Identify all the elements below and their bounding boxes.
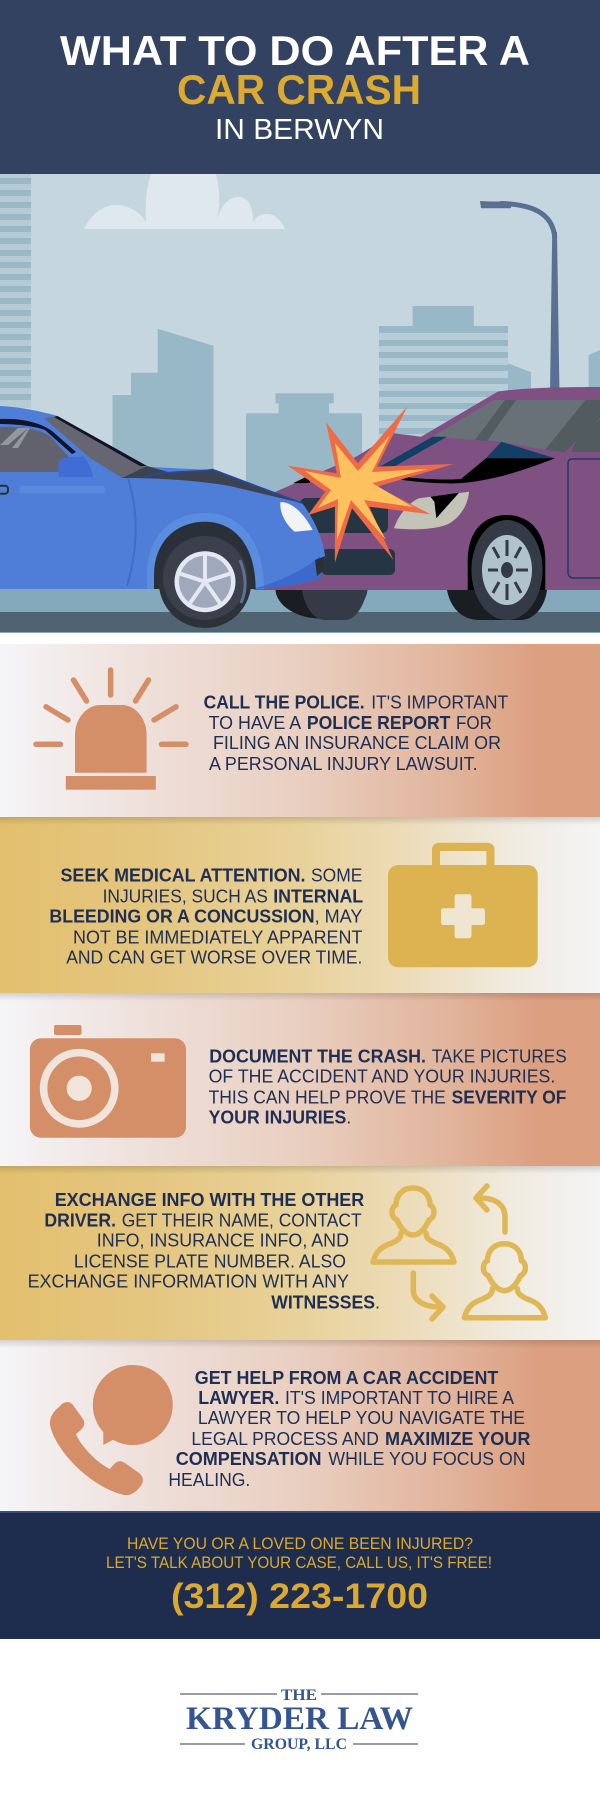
text: document the crash: [209, 1046, 567, 1127]
text: seek medical attention: , MAY: [315, 906, 362, 926]
text: get help from a lawyer: LAWYER.: [198, 1388, 279, 1408]
text: document the crash: .: [346, 1107, 351, 1127]
text: get help from a lawyer: WHILE YOU FOCUS ON: [328, 1449, 526, 1469]
street lamp: [480, 201, 560, 395]
text: call the police: CALL THE POLICE.: [204, 692, 365, 712]
text: document the crash: TAKE PICTURES: [432, 1046, 567, 1066]
text: document the crash: DOCUMENT THE CRASH.: [209, 1046, 426, 1066]
skyline buildings: [112, 306, 600, 520]
logo: The Kryder Law Group, LLC: THE: [281, 1687, 317, 1704]
text: get help from a lawyer: COMPENSATION: [176, 1449, 322, 1469]
text: document the crash: OF THE ACCIDENT AND YOUR INJURIES.: [209, 1067, 555, 1087]
header band: [0, 0, 600, 174]
text: get help from a lawyer: LEGAL PROCESS AND: [191, 1429, 379, 1449]
call to action text: [106, 1534, 492, 1572]
text: call the police: POLICE REPORT: [307, 713, 450, 733]
text: seek medical attention: SEEK MEDICAL ATTENTION.: [60, 866, 306, 886]
text: get help from a lawyer: HEALING.: [168, 1470, 250, 1490]
text: exchange info: EXCHANGE INFORMATION WITH ANY: [28, 1271, 349, 1291]
panel: document the crash: [0, 993, 600, 1166]
text: seek medical attention: BLEEDING OR A CONCUSSION: [49, 906, 315, 926]
icon: phone with speech bubble: [50, 1365, 173, 1495]
text: seek medical attention: INTERNAL: [273, 886, 363, 906]
text: exchange info: WITNESSES: [271, 1292, 375, 1312]
text: seek medical attention: INJURIES, SUCH AS: [103, 886, 268, 906]
text: document the crash: SEVERITY OF: [452, 1087, 566, 1107]
title: [60, 27, 530, 146]
text: exchange info: LICENSE PLATE NUMBER. ALSO: [74, 1251, 346, 1271]
title: CAR CRASH: [177, 66, 421, 113]
text: call the police: IT'S IMPORTANT: [371, 692, 508, 712]
text: call the police: FILING AN INSURANCE CLAIM OR: [213, 733, 501, 753]
text: seek medical attention: [49, 866, 363, 967]
text: call the police: [204, 692, 508, 774]
call to action text: LET'S TALK ABOUT YOUR CASE, CALL US, IT'S FREE!: [106, 1553, 492, 1572]
text: get help from a lawyer: GET HELP FROM A CAR ACCIDENT: [195, 1368, 498, 1388]
text: document the crash: YOUR INJURIES: [209, 1107, 346, 1127]
text: exchange info: EXCHANGE INFO WITH THE OTHER: [55, 1190, 364, 1210]
text: exchange info: GET THEIR NAME, CONTACT: [122, 1211, 362, 1231]
panel: call the police: [0, 644, 600, 817]
text: seek medical attention: SOME: [311, 866, 362, 886]
text: get help from a lawyer: LAWYER TO HELP YOU NAVIGATE THE: [198, 1408, 525, 1428]
illustration: car crash scene: [0, 174, 600, 633]
icon: siren: [36, 670, 186, 790]
text: seek medical attention: AND CAN GET WORSE OVER TIME.: [66, 947, 362, 967]
panel: exchange info: [0, 1166, 600, 1340]
text: call the police: A PERSONAL INJURY LAWSUIT.: [209, 754, 478, 774]
text: call the police: TO HAVE A: [209, 713, 302, 733]
text: call the police: FOR: [456, 713, 492, 733]
text: get help from a lawyer: IT'S IMPORTANT TO HIRE A: [285, 1388, 515, 1408]
logo: The Kryder Law Group, LLC: [180, 1687, 418, 1753]
cloud: [84, 174, 285, 229]
panel: get help from a lawyer: [0, 1340, 600, 1512]
text: exchange info: .: [375, 1292, 380, 1312]
call to action band: [0, 1511, 600, 1639]
text: exchange info: INFO, INSURANCE INFO, AND: [97, 1231, 349, 1251]
text: exchange info: [28, 1190, 380, 1312]
purple car: [253, 387, 600, 620]
door outline: [568, 459, 600, 578]
logo: The Kryder Law Group, LLC: KRYDER LAW: [186, 1701, 413, 1737]
text: get help from a lawyer: [168, 1368, 530, 1490]
road: [0, 589, 600, 633]
icon: medical bag: [388, 843, 538, 967]
text: document the crash: THIS CAN HELP PROVE THE: [209, 1087, 446, 1107]
phone number: (312) 223-1700: [171, 1577, 428, 1616]
logo: The Kryder Law Group, LLC: GROUP, LLC: [251, 1736, 347, 1753]
panel: seek medical attention: [0, 817, 600, 993]
blue car: [0, 406, 325, 628]
text: exchange info: DRIVER.: [44, 1211, 116, 1231]
icon: camera: [30, 1025, 186, 1138]
icon: two people exchanging info: [373, 1186, 545, 1319]
text: get help from a lawyer: MAXIMIZE YOUR: [385, 1429, 530, 1449]
title: WHAT TO DO AFTER A: [60, 27, 530, 74]
left building: [0, 174, 31, 408]
call to action text: HAVE YOU OR A LOVED ONE BEEN INJURED?: [127, 1534, 473, 1553]
explosion: [288, 406, 454, 563]
title: IN BERWYN: [215, 114, 384, 146]
text: seek medical attention: NOT BE IMMEDIATELY APPARENT: [73, 927, 362, 947]
